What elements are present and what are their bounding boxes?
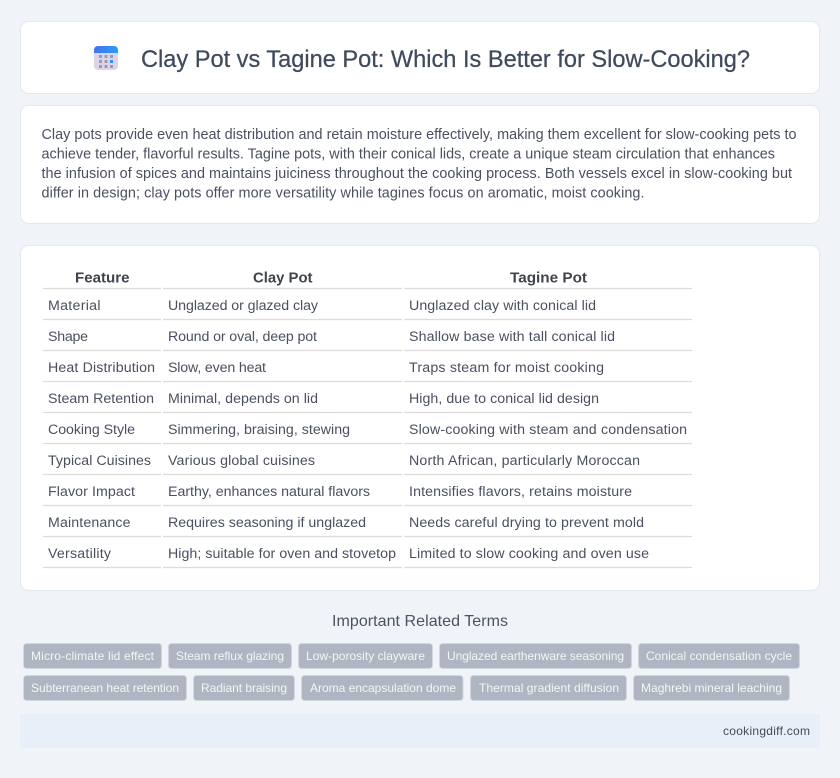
table rows: Requires seasoning if unglazed (168, 515, 366, 531)
footer bar (20, 714, 820, 748)
table rows: Intensifies flavors, retains moisture (409, 484, 632, 500)
intro text: differ in design; clay pots offer more versatility while tagines focus on aromatic, moist cooking. (42, 186, 644, 202)
intro text (42, 127, 796, 202)
related term tags: Aroma encapsulation dome (310, 681, 456, 695)
table rows: Unglazed clay with conical lid (409, 298, 596, 314)
table rows: Round or oval, deep pot (168, 329, 317, 345)
table rows: Unglazed or glazed clay (168, 298, 319, 314)
panel: introduction (20, 106, 820, 224)
table rows: High, due to conical lid design (409, 391, 599, 407)
related term tags: Conical condensation cycle (646, 649, 792, 663)
table rows: Typical Cuisines (48, 453, 151, 469)
table rows: Traps steam for moist cooking (409, 360, 604, 376)
table rows: High; suitable for oven and stovetop (168, 546, 396, 562)
table rows: Cooking Style (48, 422, 135, 438)
table rows: Material (48, 298, 100, 314)
table rows: Slow-cooking with steam and condensation (409, 422, 687, 438)
table rows: Versatility (48, 546, 112, 562)
table rows: Minimal, depends on lid (168, 391, 318, 407)
table rows: Shape (48, 329, 88, 345)
related term tags: Unglazed earthenware seasoning (447, 649, 624, 663)
related term tags: Low-porosity clayware (306, 649, 425, 663)
table rows: Steam Retention (48, 391, 154, 407)
related terms heading: Important Related Terms (332, 613, 508, 630)
table rows (43, 288, 692, 568)
related term tags: Thermal gradient diffusion (479, 681, 619, 695)
table header: Feature (75, 270, 130, 286)
intro text: the infusion of spices and maintains juiciness throughout the cooking process. Both vessels excel in slow-cooking but (42, 166, 792, 182)
intro text: achieve tender, flavorful results. Tagine pots, with their conical lids, create a unique steam circulation that enhances (42, 146, 775, 162)
table rows: Maintenance (48, 515, 131, 531)
table rows: Limited to slow cooking and oven use (409, 546, 649, 562)
table rows: Heat Distribution (48, 360, 155, 376)
table rows: Earthy, enhances natural flavors (168, 484, 370, 500)
table header (75, 270, 587, 286)
footer source: cookingdiff.com (723, 724, 810, 738)
table rows: Flavor Impact (48, 484, 135, 500)
table rows: Slow, even heat (168, 360, 266, 376)
table rows: Shallow base with tall conical lid (409, 329, 615, 345)
related term tags: Subterranean heat retention (31, 681, 179, 695)
related term tags: Maghrebi mineral leaching (641, 681, 782, 695)
table rows: Simmering, braising, stewing (168, 422, 350, 438)
related term tags (24, 644, 800, 700)
table rows: Various global cuisines (168, 453, 315, 469)
title: Clay Pot vs Tagine Pot: Which Is Better for Slow-Cooking? (141, 46, 750, 73)
intro text: Clay pots provide even heat distribution and retain moisture effectively, making them excellent for slow-cooking pets to (42, 127, 796, 143)
panel: comparison table (20, 246, 820, 590)
table header: Tagine Pot (510, 270, 587, 286)
table rows: North African, particularly Moroccan (409, 453, 640, 469)
table header: Clay Pot (253, 270, 313, 286)
related term tags: Micro-climate lid effect (31, 649, 155, 663)
header panel (20, 22, 820, 94)
icon: calendar (94, 46, 118, 70)
related term tags: Steam reflux glazing (176, 649, 284, 663)
table rows: Needs careful drying to prevent mold (409, 515, 644, 531)
related term tags: Radiant braising (201, 681, 287, 695)
